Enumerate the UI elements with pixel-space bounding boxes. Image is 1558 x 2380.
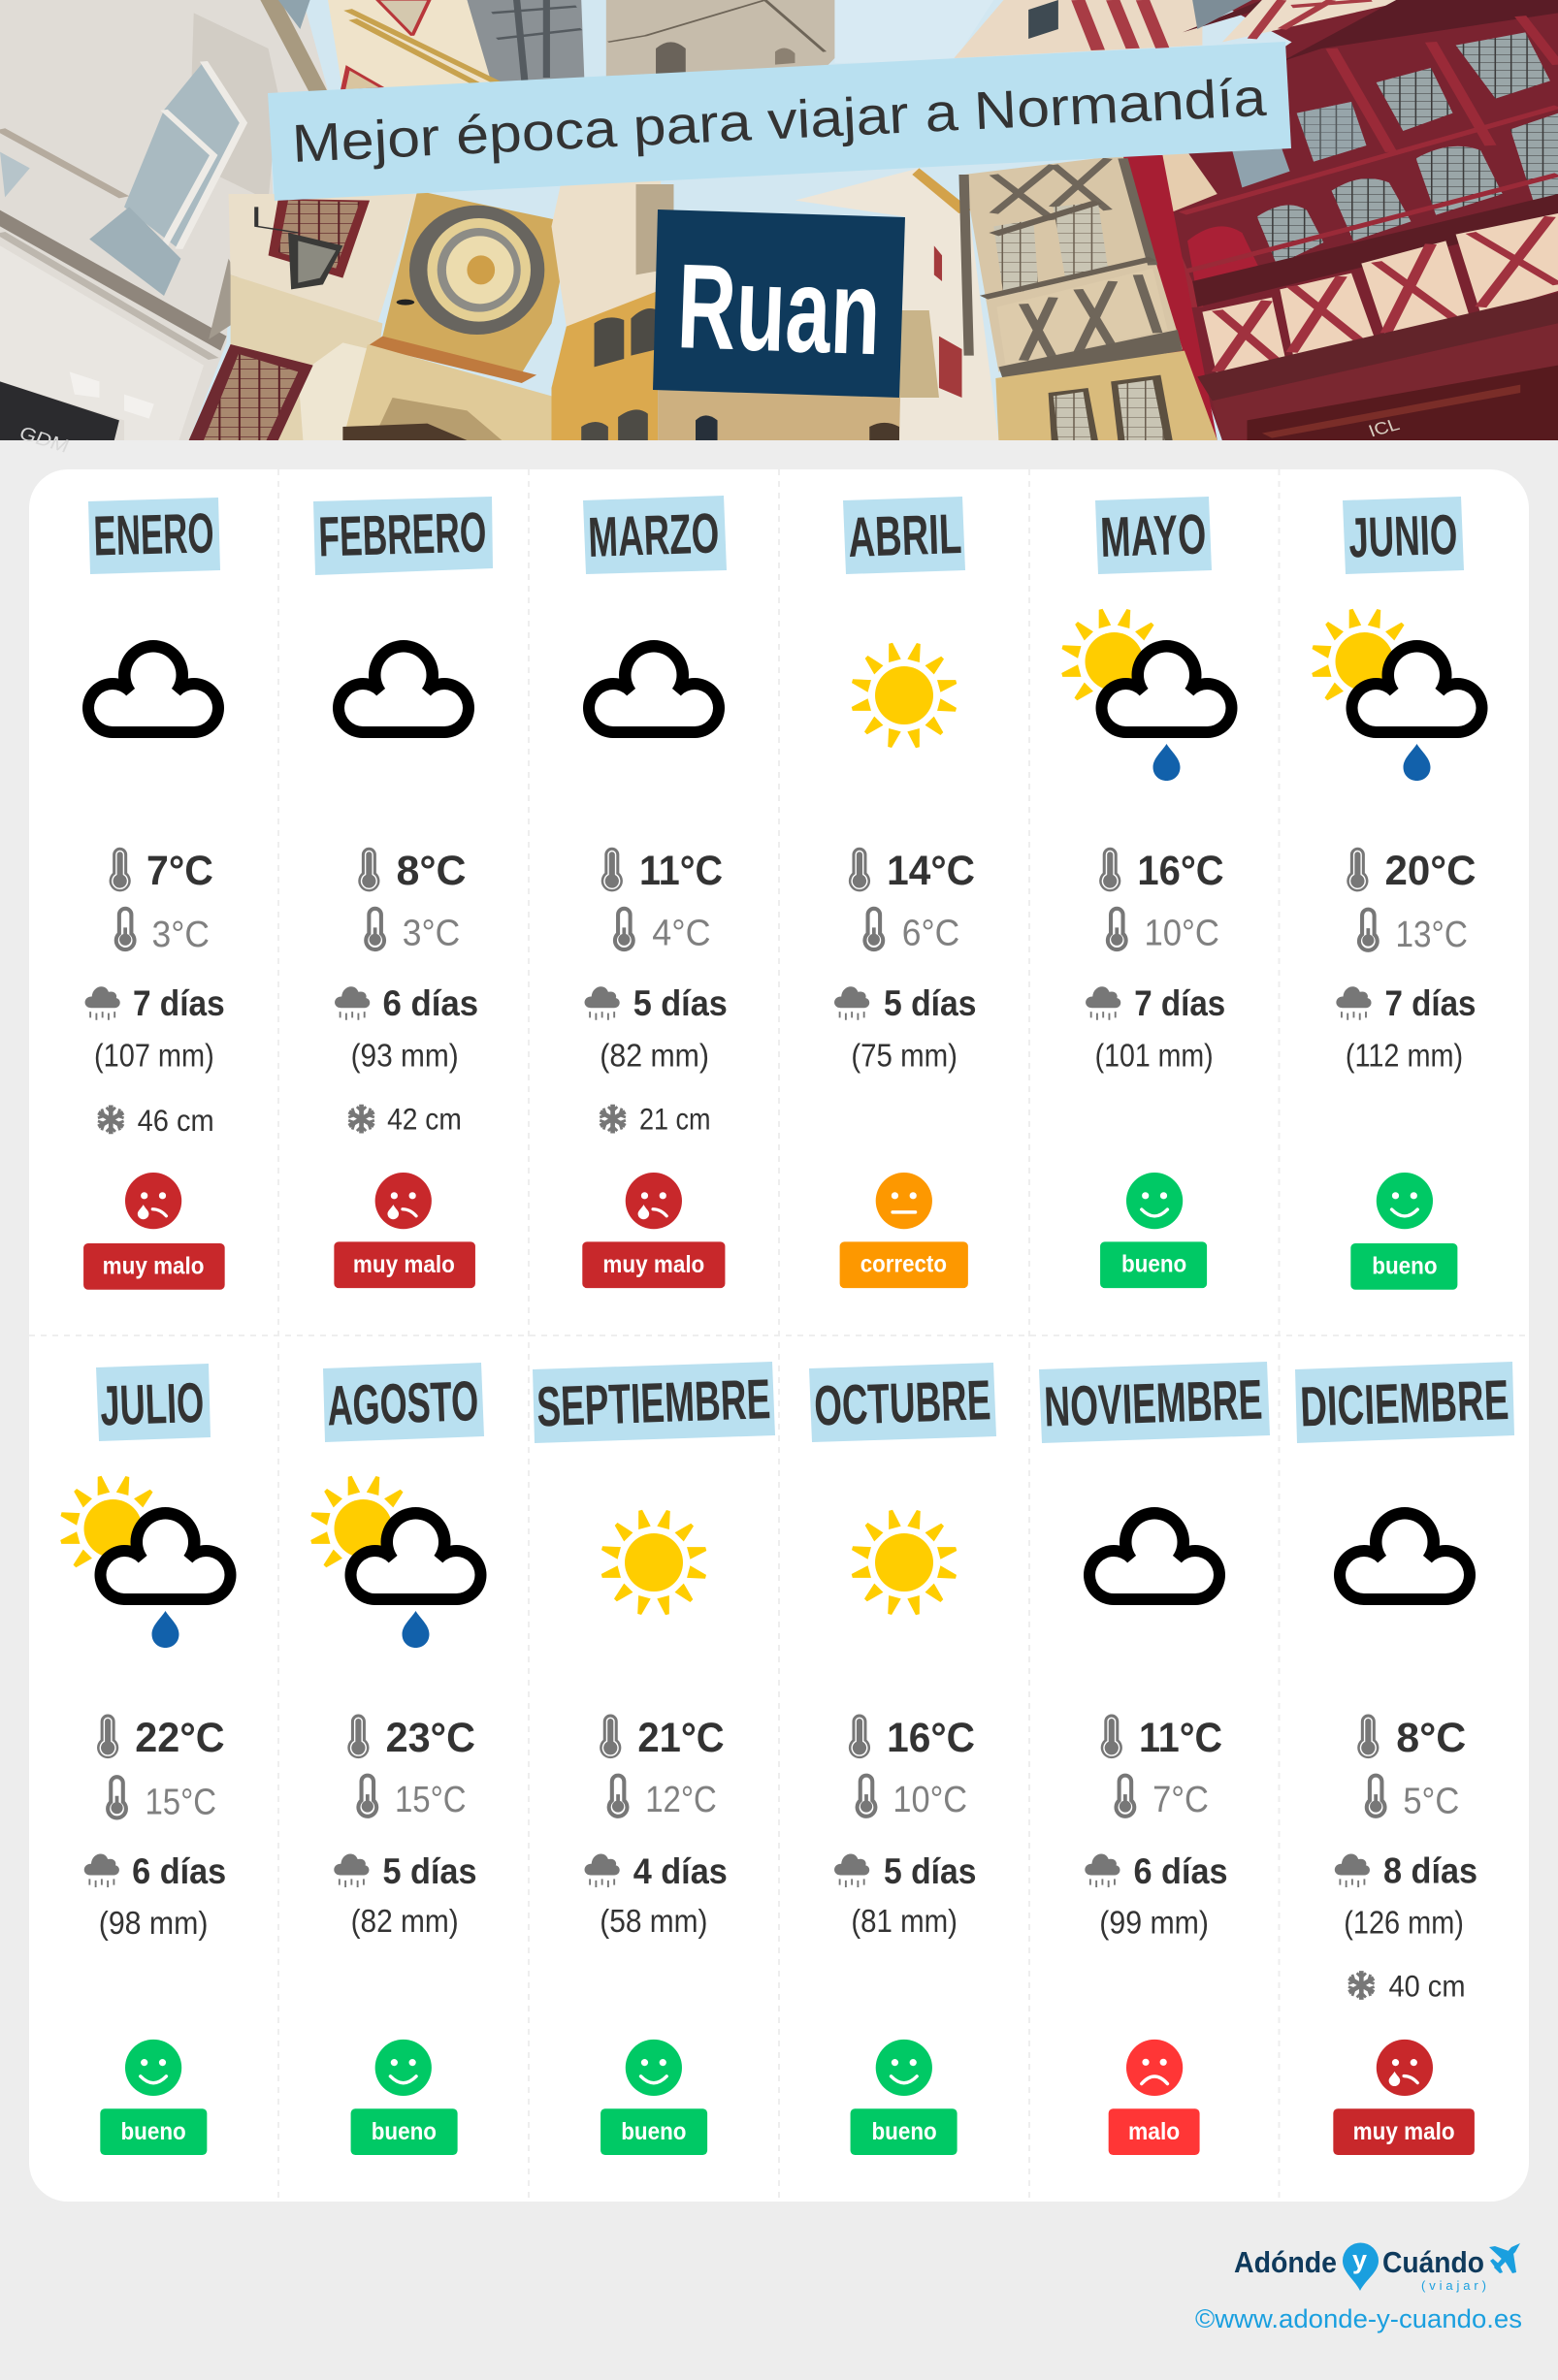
min temperature	[1367, 1776, 1459, 1820]
icon: cloud, febrero	[333, 640, 474, 738]
rating: muy malo: muy malo	[353, 1251, 455, 1278]
max temperature	[1101, 1715, 1222, 1760]
panel: climate table card	[29, 469, 1529, 2202]
min temperature	[366, 909, 460, 953]
icon: sun, cloud and rain, mayo	[1060, 608, 1238, 781]
rain days: 5 días	[884, 1851, 976, 1891]
rating: bueno	[351, 2040, 458, 2155]
max temperature: 11°C	[639, 848, 723, 893]
rating: muy malo	[1333, 2040, 1475, 2155]
max temperature: 16°C	[1137, 848, 1224, 893]
rating: muy malo: muy malo	[103, 1253, 205, 1280]
rating: bueno: bueno	[1121, 1251, 1186, 1278]
header photo: Rouen street with half-timbered houses: GDM	[16, 423, 72, 457]
logo: Adónde y Cuándo: Adónde	[1234, 2245, 1337, 2279]
rain days: 7 días	[1385, 983, 1476, 1023]
rating: bueno: bueno	[1372, 1252, 1438, 1279]
min temperature: 12°C	[645, 1779, 717, 1819]
month heading: MARZO	[583, 496, 727, 574]
month heading: SEPTIEMBRE	[533, 1362, 775, 1443]
min temperature	[1116, 1776, 1209, 1819]
rainfall: (99 mm)	[1099, 1904, 1209, 1940]
icon: location pin	[1343, 2242, 1379, 2291]
snow	[348, 1103, 462, 1137]
website credit: ©www.adonde-y-cuando.es	[1195, 2304, 1522, 2333]
rain days	[1335, 1851, 1477, 1891]
data: septiembre	[585, 1715, 728, 2155]
data: mayo	[1086, 848, 1225, 1288]
month heading: ABRIL: ABRIL	[847, 502, 962, 569]
rainfall: (58 mm)	[600, 1903, 707, 1939]
max temperature: 7°C	[146, 848, 213, 893]
month heading: MAYO	[1095, 497, 1212, 574]
icon: cloud, marzo	[583, 640, 725, 738]
rating: bueno: bueno	[871, 2118, 937, 2145]
rainfall: (112 mm)	[1346, 1037, 1463, 1073]
min temperature: 3°C	[152, 914, 210, 954]
max temperature: 22°C	[135, 1715, 225, 1760]
min temperature	[116, 909, 210, 954]
max temperature: 14°C	[887, 848, 975, 893]
rating: muy malo: muy malo	[602, 1251, 704, 1278]
rating: bueno	[851, 2040, 958, 2155]
logo: Adónde y Cuándo: (viajar)	[1421, 2278, 1486, 2293]
icon: sun, abril	[851, 642, 958, 749]
icon: cloud, enero	[82, 640, 224, 738]
rating: muy malo	[582, 1173, 725, 1288]
max temperature	[1099, 848, 1224, 893]
rain days	[85, 983, 225, 1023]
rain days: 4 días	[633, 1851, 728, 1891]
rating: bueno	[600, 2040, 707, 2155]
rain days	[1085, 1851, 1228, 1891]
rain days	[834, 983, 976, 1023]
month heading: AGOSTO: AGOSTO	[326, 1369, 479, 1437]
rainfall: (98 mm)	[99, 1905, 208, 1941]
max temperature	[97, 1715, 225, 1760]
max temperature: 23°C	[386, 1715, 475, 1760]
data: junio	[1336, 848, 1476, 1290]
max temperature	[347, 1715, 475, 1760]
rain days	[1086, 983, 1225, 1023]
snow: 21 cm	[639, 1103, 711, 1137]
month heading: NOVIEMBRE	[1039, 1362, 1270, 1443]
rating: bueno: bueno	[621, 2118, 687, 2145]
month heading: JULIO	[96, 1364, 211, 1441]
min temperature	[1108, 909, 1219, 953]
min temperature: 10°C	[1144, 913, 1219, 953]
rain days: 7 días	[1134, 983, 1225, 1023]
rain days	[334, 1851, 477, 1891]
rating: muy malo	[334, 1173, 475, 1288]
min temperature: 13°C	[1396, 914, 1468, 954]
data: febrero	[334, 848, 478, 1288]
max temperature	[1347, 848, 1476, 893]
month heading: SEPTIEMBRE: SEPTIEMBRE	[536, 1367, 771, 1438]
rating: malo	[1109, 2040, 1200, 2155]
icon: cloud, diciembre	[1334, 1507, 1476, 1605]
rating: muy malo	[83, 1173, 225, 1290]
icon: sun, cloud and rain, junio	[1311, 608, 1488, 781]
rainfall: (107 mm)	[94, 1037, 214, 1073]
rating: correcto	[840, 1173, 968, 1288]
rating: malo: malo	[1128, 2118, 1180, 2145]
rain days	[834, 1851, 976, 1891]
rain days: 7 días	[133, 983, 225, 1023]
icon: sun, cloud and rain, agosto	[309, 1475, 487, 1648]
max temperature	[110, 848, 213, 893]
city label: Ruan	[653, 209, 905, 398]
rainfall: (101 mm)	[1095, 1037, 1214, 1073]
monthly climate data, all cells	[83, 848, 1477, 2155]
data: noviembre	[1085, 1715, 1228, 2155]
snow: 40 cm	[1388, 1969, 1466, 2003]
month heading: NOVIEMBRE: NOVIEMBRE	[1043, 1368, 1263, 1438]
city label: Ruan: Ruan	[675, 240, 883, 380]
min temperature	[858, 1776, 967, 1819]
rain days: 5 días	[884, 983, 976, 1023]
rating: bueno	[1100, 1173, 1207, 1288]
month heading: JULIO: JULIO	[99, 1371, 205, 1437]
min temperature	[609, 1776, 717, 1819]
min temperature: 5°C	[1403, 1780, 1459, 1820]
min temperature	[864, 909, 959, 953]
max temperature: 20°C	[1385, 848, 1476, 893]
rainfall: (126 mm)	[1344, 1904, 1464, 1940]
rating: muy malo: muy malo	[1353, 2118, 1455, 2145]
icon: sun, cloud and rain, julio	[59, 1475, 236, 1648]
rainfall: (75 mm)	[851, 1037, 958, 1073]
month heading: ENERO	[88, 498, 220, 574]
min temperature: 7°C	[1152, 1779, 1209, 1819]
max temperature: 21°C	[637, 1715, 725, 1760]
rainfall: (93 mm)	[351, 1037, 459, 1073]
rain days: 6 días	[132, 1851, 226, 1891]
snow	[600, 1103, 711, 1137]
min temperature: 15°C	[145, 1782, 216, 1822]
logo: Adónde y Cuándo: Cuándo	[1382, 2245, 1484, 2279]
min temperature: 3°C	[403, 913, 460, 953]
data: octubre	[834, 1715, 976, 2155]
min temperature: 6°C	[902, 913, 959, 953]
rain days: 6 días	[382, 983, 478, 1023]
title banner	[268, 42, 1291, 201]
rain days: 5 días	[382, 1851, 477, 1891]
min temperature	[108, 1777, 216, 1822]
rainfall: (82 mm)	[600, 1037, 709, 1073]
month heading: FEBRERO: FEBRERO	[317, 500, 487, 568]
weather icons	[59, 608, 1488, 1648]
rating: correcto: correcto	[860, 1251, 947, 1278]
snow: 42 cm	[387, 1103, 462, 1137]
rain days	[335, 983, 478, 1023]
icon: airplane	[1489, 2243, 1520, 2273]
month heading: FEBRERO	[313, 497, 493, 575]
max temperature: 8°C	[1396, 1715, 1466, 1760]
month heading: AGOSTO	[323, 1363, 484, 1442]
header photo: Rouen street with half-timbered houses	[0, 0, 1558, 457]
min temperature: 4°C	[652, 913, 711, 953]
max temperature	[849, 848, 975, 893]
icon: sun, octubre	[851, 1509, 958, 1616]
snow	[98, 1104, 214, 1138]
month heading: OCTUBRE: OCTUBRE	[813, 1368, 991, 1437]
snow: 46 cm	[138, 1104, 214, 1138]
data: julio	[84, 1715, 226, 2155]
min temperature	[615, 909, 711, 953]
max temperature	[849, 1715, 975, 1760]
max temperature	[358, 848, 467, 893]
min temperature	[358, 1776, 467, 1819]
max temperature: 8°C	[397, 848, 467, 893]
data: diciembre	[1333, 1715, 1477, 2155]
rating: bueno	[1350, 1173, 1457, 1290]
max temperature: 16°C	[887, 1715, 975, 1760]
rain days	[1336, 983, 1476, 1023]
month heading: ABRIL	[843, 497, 965, 574]
month heading: JUNIO	[1343, 497, 1464, 574]
data: marzo	[582, 848, 728, 1288]
snow	[1348, 1969, 1466, 2003]
rainfall: (81 mm)	[851, 1903, 958, 1939]
data: abril	[834, 848, 976, 1288]
title text: Mejor época para viajar a Normandía	[291, 67, 1268, 174]
rain days: 5 días	[633, 983, 728, 1023]
month heading: ENERO: ENERO	[93, 501, 214, 567]
max temperature	[601, 848, 723, 893]
rainfall: (82 mm)	[351, 1903, 459, 1939]
max temperature: 11°C	[1139, 1715, 1222, 1760]
max temperature	[1357, 1715, 1466, 1760]
icon: cloud, noviembre	[1084, 1507, 1225, 1605]
month heading: MARZO: MARZO	[587, 501, 720, 569]
rating: bueno: bueno	[120, 2118, 186, 2145]
month heading: MAYO: MAYO	[1099, 502, 1207, 569]
month heading: OCTUBRE	[809, 1363, 996, 1442]
rating: bueno: bueno	[372, 2118, 437, 2145]
header photo: Rouen street with half-timbered houses: ICL	[1366, 415, 1403, 441]
icon: sun, septiembre	[600, 1509, 707, 1616]
icon: location pin: y	[1352, 2245, 1367, 2274]
min temperature	[1359, 910, 1468, 954]
max temperature	[600, 1715, 725, 1760]
data: enero	[83, 848, 225, 1290]
rating: bueno	[100, 2040, 207, 2155]
rain days	[585, 983, 728, 1023]
rain days: 6 días	[1133, 1851, 1228, 1891]
rain days: 8 días	[1383, 1851, 1477, 1891]
logo: Adónde y Cuándo	[1234, 2242, 1520, 2293]
min temperature: 10°C	[893, 1779, 967, 1819]
data: agosto	[334, 1715, 477, 2155]
month heading: JUNIO: JUNIO	[1347, 503, 1458, 569]
min temperature: 15°C	[395, 1779, 467, 1819]
rain days	[585, 1851, 728, 1891]
rain days	[84, 1851, 226, 1891]
